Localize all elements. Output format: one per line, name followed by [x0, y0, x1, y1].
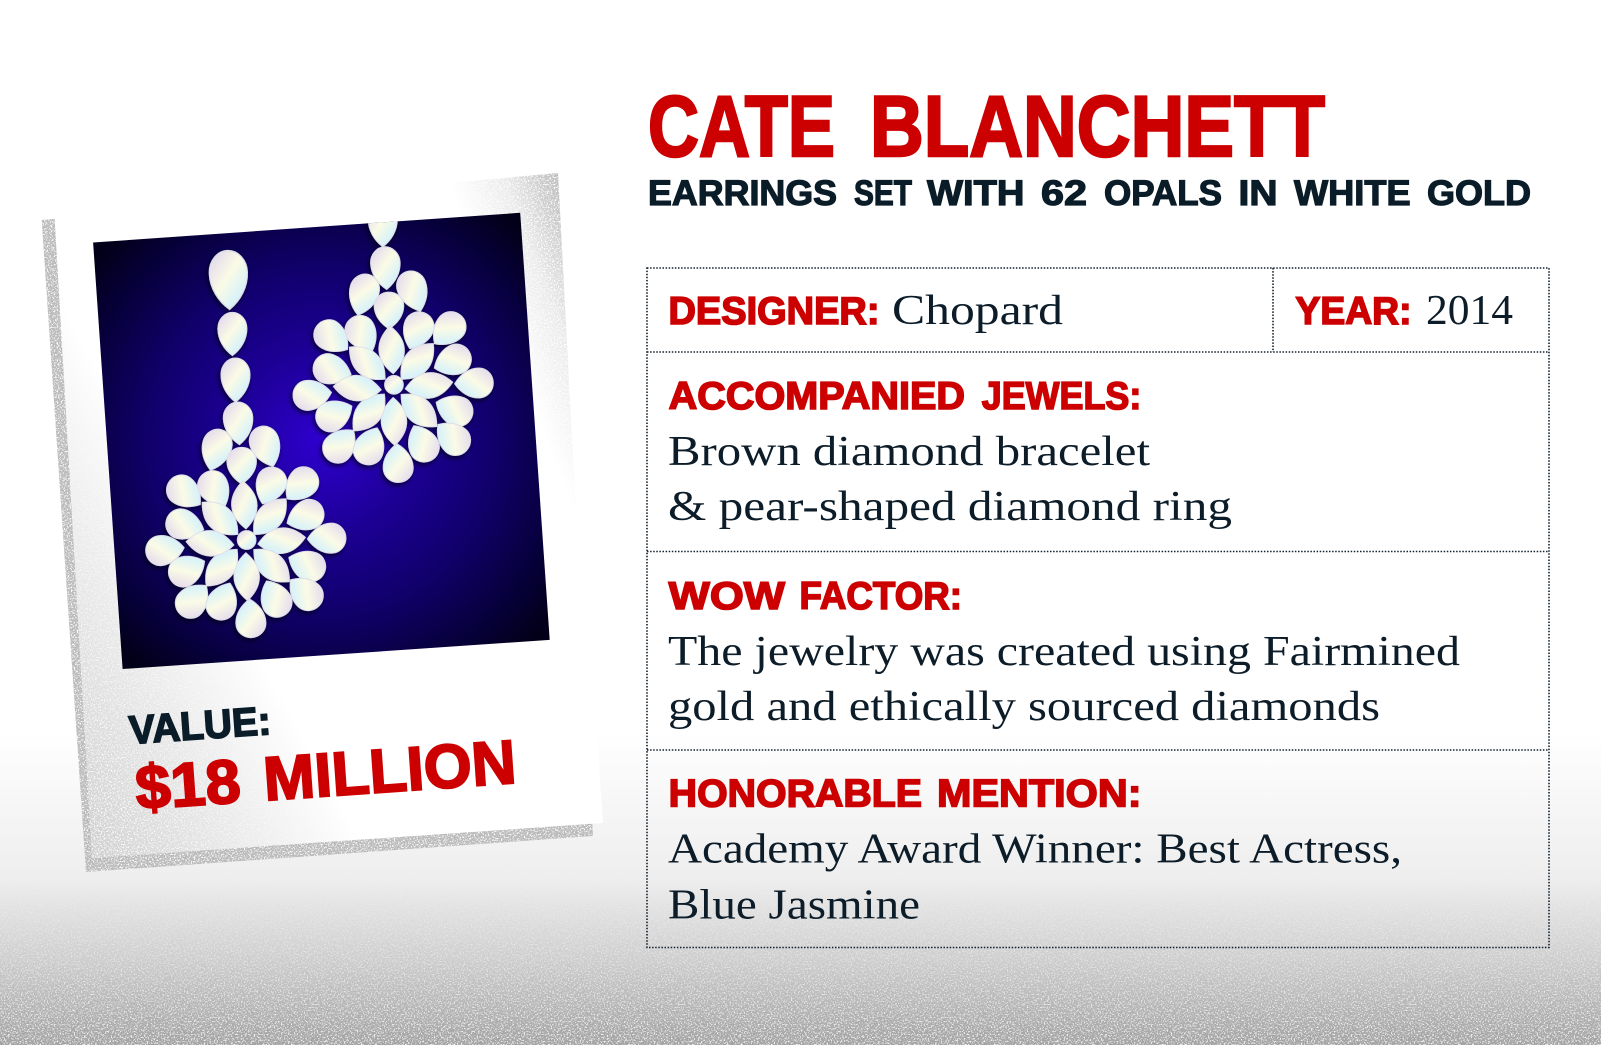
row: accompanied jewels — [668, 375, 1232, 530]
row: honorable mention: Blue Jasmine — [668, 882, 920, 928]
white card face — [54, 173, 603, 858]
row: honorable mention — [668, 772, 1402, 928]
row: accompanied jewels: Brown diamond bracelet — [668, 429, 1150, 475]
row: designer: Chopard — [892, 288, 1063, 334]
subtitle: WITH — [927, 174, 1024, 213]
row: year: YEAR: — [1296, 290, 1412, 333]
panel: polaroid photo card — [42, 173, 603, 872]
row: honorable mention: Academy Award Winner: Best Actress, — [668, 826, 1402, 872]
subtitle: IN — [1238, 174, 1278, 213]
row: wow factor: WOW — [669, 575, 785, 618]
row: wow factor: gold and ethically sourced diamonds — [668, 684, 1380, 730]
subtitle: WHITE — [1294, 174, 1411, 213]
row: year: 2014 — [1426, 288, 1513, 334]
glitter frame — [42, 173, 593, 872]
value amount: $18 — [133, 747, 243, 823]
title: BLANCHETT — [870, 79, 1325, 175]
subtitle — [648, 174, 1531, 213]
subtitle: SET — [854, 174, 912, 213]
subtitle: 62 — [1041, 174, 1087, 213]
value label: VALUE: — [128, 699, 272, 753]
subtitle: OPALS — [1104, 174, 1222, 213]
row: designer — [668, 288, 1063, 334]
photo background — [93, 213, 550, 669]
subtitle: EARRINGS — [648, 174, 837, 213]
subtitle: GOLD — [1427, 174, 1531, 213]
row: honorable mention: HONORABLE — [669, 772, 922, 816]
value amount — [133, 728, 518, 823]
row: year — [1296, 288, 1513, 334]
row: accompanied jewels: ACCOMPANIED — [669, 375, 965, 418]
row: honorable mention: MENTION: — [937, 772, 1142, 816]
row: accompanied jewels: JEWELS: — [982, 375, 1141, 418]
row: designer: DESIGNER: — [668, 290, 880, 333]
value amount: MILLION — [261, 728, 518, 814]
row: wow factor — [668, 575, 1460, 730]
icon: opal earrings — [142, 221, 495, 643]
row: accompanied jewels: & pear-shaped diamond ring — [668, 484, 1232, 530]
panel: details table — [647, 268, 1549, 948]
row: wow factor: FACTOR: — [800, 575, 962, 618]
row: wow factor: The jewelry was created using Fairmined — [668, 629, 1460, 675]
title: CATE — [648, 79, 835, 175]
title — [648, 79, 1325, 175]
